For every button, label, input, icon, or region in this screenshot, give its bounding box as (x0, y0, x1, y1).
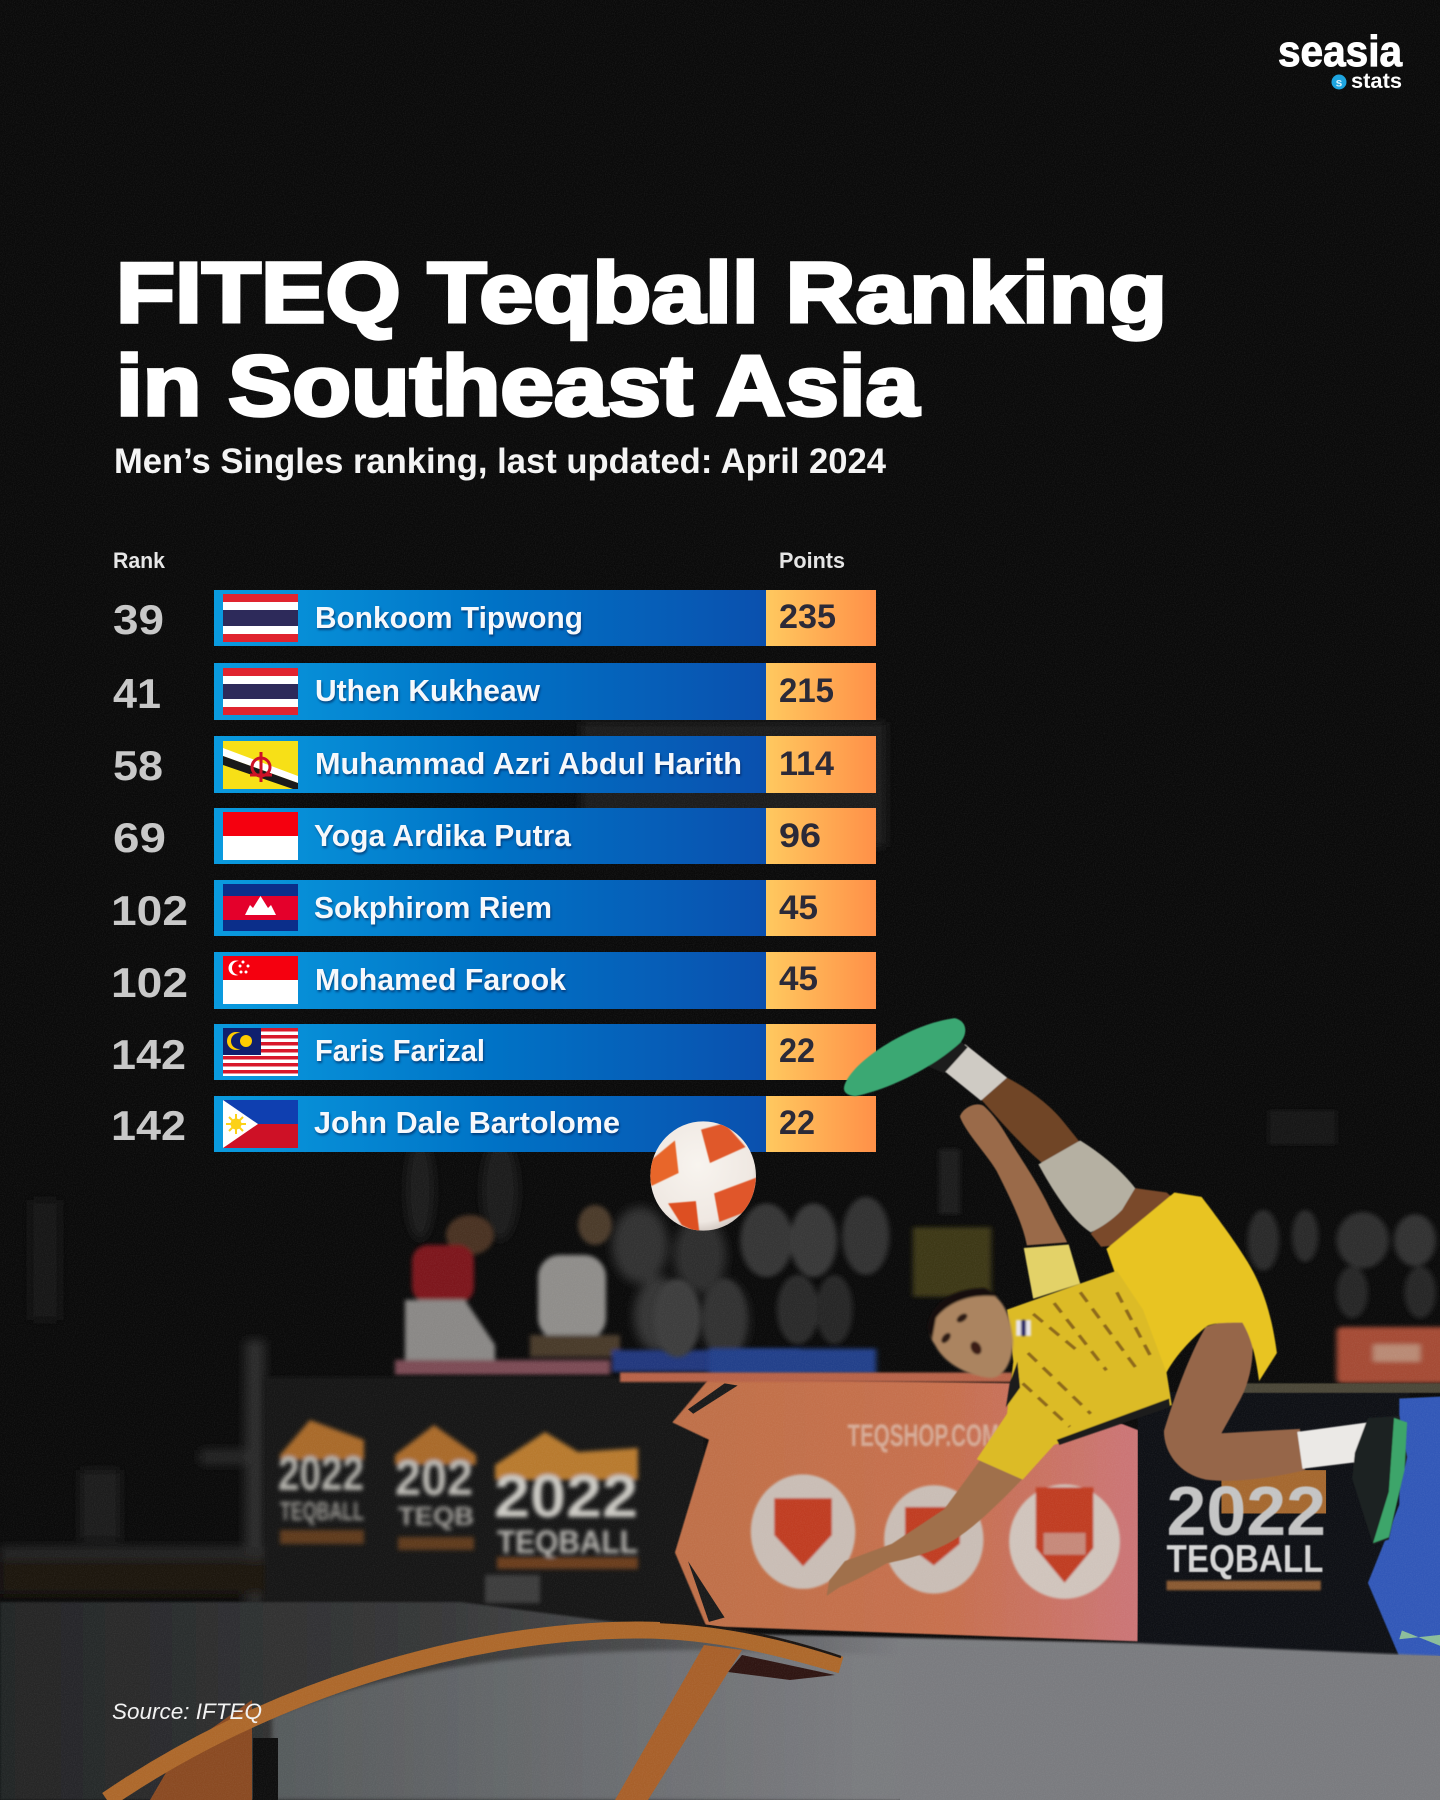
dark left banner with 2022 logos: TEQBALL (280, 1496, 364, 1526)
faint patch behind the chart (581, 722, 886, 847)
source note: Source: IFTEQ (112, 1699, 262, 1724)
row: Faris Farizal (111, 1024, 876, 1080)
title: FITEQ Teqball Ranking (116, 246, 1167, 341)
row: Yoga Ardika Putra (113, 808, 876, 864)
row: Muhammad Azri Abdul Harith (113, 736, 876, 793)
row: Faris Farizal: 142 (111, 1031, 186, 1078)
flag: Thailand (223, 668, 298, 715)
row: Uthen Kukheaw: 215 (779, 672, 834, 710)
background photo: teqball table (107, 1560, 900, 1800)
player: head (927, 1288, 1031, 1378)
row: Sokphirom Riem (111, 880, 876, 936)
row: Faris Farizal: 22 (779, 1032, 815, 1070)
crowd and stands, left (0, 1140, 749, 1605)
row: Yoga Ardika Putra: 69 (113, 814, 166, 861)
dark left banner with 2022 logos: TEQBALL (497, 1524, 638, 1560)
logo: seasia stats: stats (1351, 70, 1402, 93)
row: Uthen Kukheaw: 41 (113, 670, 161, 717)
row: Bonkoom Tipwong: 235 (779, 598, 836, 636)
row: Mohamed Farook: 102 (111, 959, 188, 1006)
player: raised leg (981, 1078, 1080, 1164)
background photo: court floor (0, 1602, 1440, 1800)
flag: Brunei (223, 741, 298, 789)
player: shorts (1106, 1193, 1277, 1381)
player: raised shoe and sock (844, 1018, 1007, 1101)
orange sponsor panel: TEQBALL (1167, 1538, 1323, 1581)
row: Bonkoom Tipwong (113, 590, 876, 646)
orange sponsor panel: 2022 (1167, 1473, 1326, 1550)
blue banner (1368, 1396, 1440, 1661)
row: John Dale Bartolome (111, 1096, 876, 1152)
jersey flag (1016, 1320, 1031, 1336)
row: John Dale Bartolome: John Dale Bartolome (314, 1105, 620, 1140)
column header: Rank: Rank (113, 548, 166, 573)
blurred sponsor text: TEQSHOP.COM (848, 1419, 999, 1453)
flag: Cambodia (223, 884, 298, 931)
seats behind officials (612, 1207, 668, 1283)
flag: Malaysia (223, 1028, 298, 1076)
column header: Points: Points (779, 548, 845, 573)
logo dot: s (1336, 76, 1343, 90)
chart: ranking table (111, 548, 876, 1152)
flag: Philippines (223, 1100, 298, 1148)
dark left banner with 2022 logos: 2022 (494, 1463, 638, 1530)
row: Mohamed Farook: 45 (779, 960, 818, 998)
player: back sock and shoe (1297, 1416, 1407, 1545)
row: Sokphirom Riem: 102 (111, 887, 188, 934)
player: knee sleeve (1038, 1140, 1135, 1232)
dark left banner with 2022 logos: 202 (395, 1450, 473, 1506)
row: Muhammad Azri Abdul Harith: Muhammad Azri Abdul Harith (315, 746, 742, 781)
dark left banner with 2022 logos (265, 1377, 705, 1627)
row: Sokphirom Riem: 45 (779, 889, 818, 927)
dark 2022 panel (1138, 1392, 1410, 1657)
row: Bonkoom Tipwong: 39 (113, 596, 164, 643)
row: Faris Farizal: Faris Farizal (315, 1033, 485, 1068)
row: Mohamed Farook: Mohamed Farook (315, 962, 567, 997)
player in yellow kit (827, 1018, 1407, 1596)
flag: Singapore (223, 956, 298, 1004)
orange sponsor panel (620, 1372, 1440, 1661)
flag: Thailand (223, 594, 298, 642)
row: John Dale Bartolome: 22 (779, 1104, 815, 1142)
ball (646, 1121, 757, 1234)
shields (751, 1474, 1120, 1599)
logo: seasia stats: seasia (1278, 27, 1402, 76)
player: jersey (977, 1271, 1172, 1480)
seats, right of the ball (654, 1110, 1440, 1383)
title: in Southeast Asia (116, 339, 920, 434)
row: Uthen Kukheaw: Uthen Kukheaw (315, 673, 541, 708)
flag: Indonesia (223, 812, 298, 860)
player: back leg (1164, 1322, 1305, 1481)
row: Mohamed Farook (111, 952, 876, 1009)
row: Bonkoom Tipwong: Bonkoom Tipwong (315, 600, 583, 635)
player: sleeve (1024, 1245, 1080, 1299)
row: Yoga Ardika Putra: 96 (779, 817, 821, 855)
row: Sokphirom Riem: Sokphirom Riem (314, 890, 552, 925)
player: lower arm (827, 1459, 1023, 1596)
background photo: courtside banners (265, 1372, 1440, 1661)
officials at the table (395, 1205, 800, 1375)
title (116, 246, 1167, 434)
row: Muhammad Azri Abdul Harith: 58 (113, 742, 163, 789)
row: Uthen Kukheaw (113, 663, 876, 720)
row: Yoga Ardika Putra: Yoga Ardika Putra (314, 818, 572, 853)
row: John Dale Bartolome: 142 (111, 1102, 186, 1149)
row: Muhammad Azri Abdul Harith: 114 (779, 745, 834, 783)
player: raised arm (960, 1104, 1067, 1245)
dark left banner with 2022 logos: 2022 (278, 1448, 364, 1501)
dark left banner with 2022 logos: TEQB (398, 1501, 474, 1531)
subtitle: Men’s Singles ranking, last updated: April 2024 (114, 442, 887, 481)
